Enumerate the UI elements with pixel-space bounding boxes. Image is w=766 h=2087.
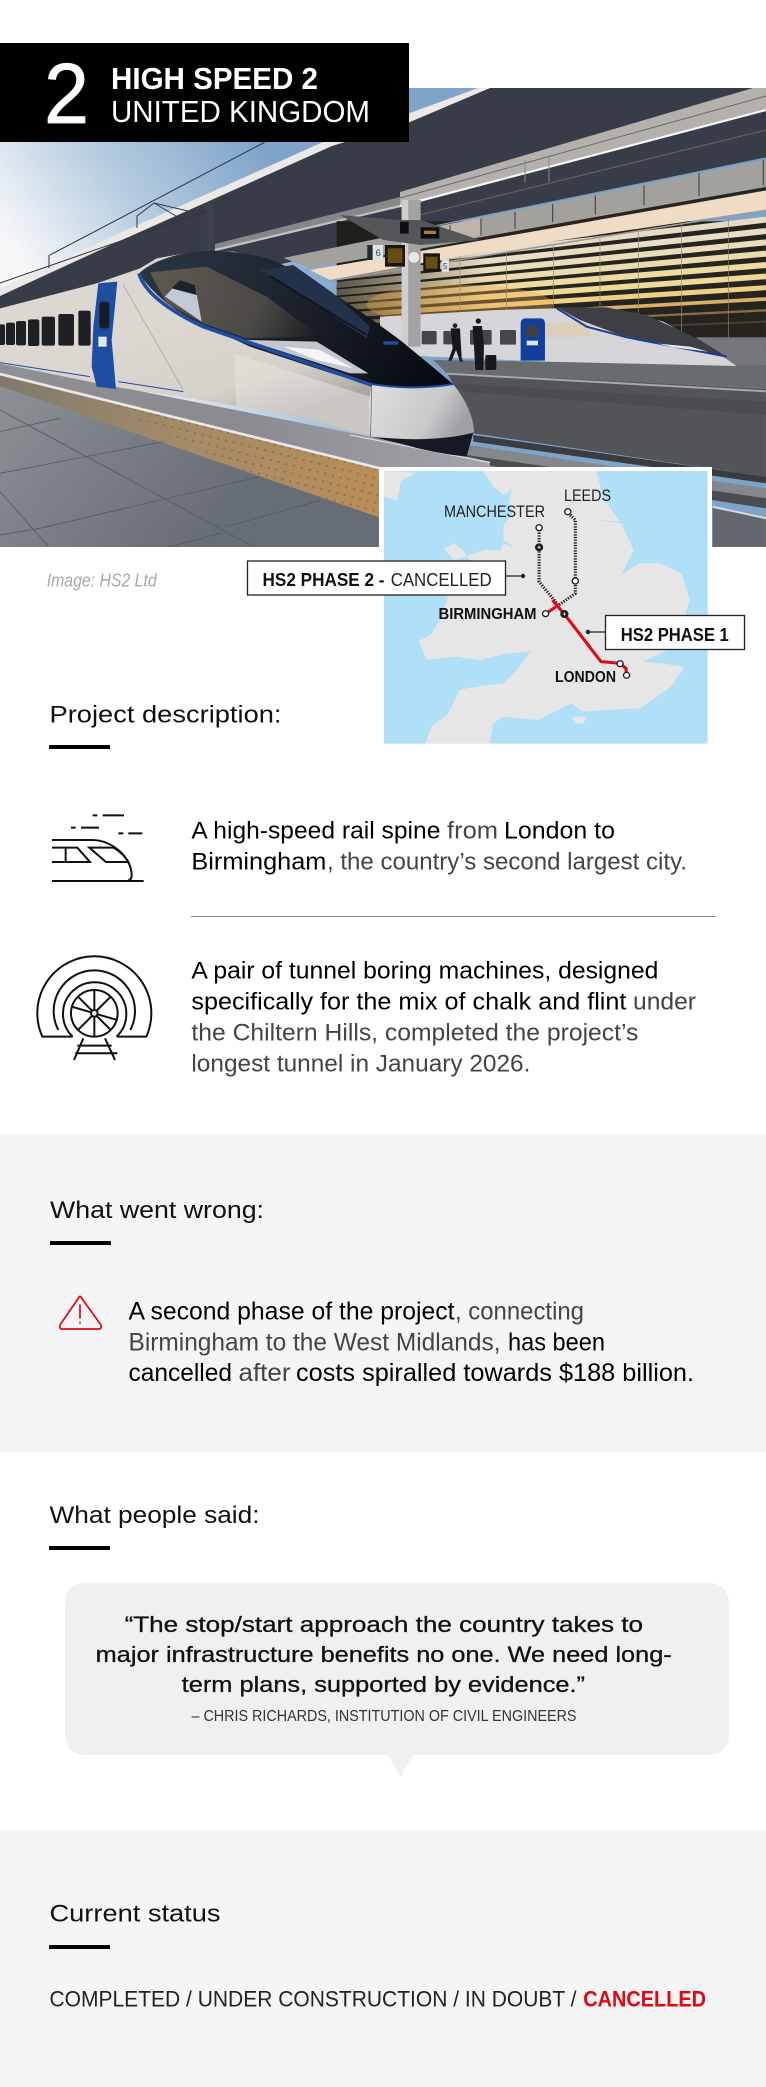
image credit: Image: HS2 Ltd [47,570,158,590]
callout: phase 2 cancelled [248,561,525,595]
quote: term plans, supported by evidence.” [182,1672,585,1697]
attribution: – CHRIS RICHARDS, INSTITUTION OF CIVIL ENGINEERS [192,1708,576,1725]
map frame [379,467,712,548]
text: rail spine: , the country’s second largest city. [327,848,687,876]
callout: phase 1: HS2 PHASE 1 [621,625,729,645]
far train, far platform and tracks [380,307,766,550]
project number: 2 [44,47,89,142]
sky and station roof [0,88,766,547]
quote [96,1612,672,1697]
text: tunnel boring machines: A pair of tunnel boring machines, designed [191,958,658,984]
icon: tunnel boring machine [37,956,151,1060]
heading rule [50,1241,111,1245]
cab [139,251,454,388]
icon: train [52,815,144,881]
blue door [92,282,117,389]
train body [0,251,474,440]
text: rail spine [191,818,687,876]
callout: phase 1 [586,616,744,650]
main train [0,251,474,457]
city label Leeds: LEEDS [564,487,611,505]
text: second phase cancelled: cancelled [128,1359,232,1387]
passenger windows [0,311,91,346]
text: rail spine: Birmingham [191,848,326,876]
panel: what people said [49,1502,729,1777]
text: second phase cancelled: costs spiralled towards $188 billion. [296,1359,694,1387]
text: tunnel boring machines [191,958,696,1078]
status options: COMPLETED / UNDER CONSTRUCTION / IN DOUBT / [50,1986,577,2012]
panel background [0,1135,766,1452]
text: second phase cancelled: , connecting [455,1298,584,1326]
heading: What people said: [50,1502,260,1529]
callout: phase 2 cancelled: HS2 PHASE 2 - [262,570,384,590]
header background [0,43,409,142]
text: rail spine: from [447,818,498,844]
heading: What went wrong: [50,1197,264,1224]
platform pillar, signs and clock: 6 [376,248,381,258]
nose [369,385,474,439]
icon: warning triangle [60,1296,101,1329]
platform pillar, signs and clock: 5 [443,262,448,271]
city label Birmingham: BIRMINGHAM [438,606,536,623]
nose skirt [371,433,473,457]
cancelled phase 2 route [539,515,575,606]
callout: phase 2 cancelled: CANCELLED [391,570,492,590]
status cancelled: CANCELLED [583,1986,706,2012]
heading rule [49,1945,110,1949]
country: UNITED KINGDOM [111,94,370,129]
text: rail spine: A high-speed rail spine [191,818,440,844]
heading: Project description: [50,702,282,728]
header band [0,43,409,142]
panel: what went wrong [0,1135,766,1452]
text: rail spine: London to [504,818,615,844]
text: tunnel boring machines: the Chiltern Hills, completed the project’s [191,1020,638,1046]
near platform and tactile strip [0,363,490,548]
city label London: LONDON [555,669,616,686]
project name: HIGH SPEED 2 [111,61,318,96]
panel: project description [37,702,716,1078]
heading rule [49,1546,110,1550]
station wall: fascia, glow and slats [283,158,766,355]
text: tunnel boring machines: longest tunnel in January 2026. [191,1050,530,1078]
photo: HS2 train at station [0,88,766,550]
text: tunnel boring machines: under [633,988,696,1016]
panel: current status [0,1831,766,2087]
body lines [0,363,183,392]
text: second phase cancelled: has been [508,1328,605,1356]
quote: major infrastructure benefits no one. We need long- [96,1642,672,1667]
heading: Current status [50,1900,220,1928]
speech bubble [65,1583,729,1777]
text: second phase cancelled [128,1298,694,1387]
text: second phase cancelled: A second phase of the project [128,1298,455,1326]
city label Manchester: MANCHESTER [444,503,545,521]
stations [536,509,630,678]
map of England and Wales [384,471,708,744]
map panel [248,467,744,744]
phase 1 route [546,600,627,675]
heading rule [49,745,110,749]
text: second phase cancelled: Birmingham to the West Midlands, [128,1328,500,1356]
panel background [0,1831,766,2087]
quote: “The stop/start approach the country takes to [125,1612,643,1637]
platform pillar, signs and clock [340,200,480,347]
text: second phase cancelled: after [238,1359,290,1387]
text: tunnel boring machines: specifically for the mix of chalk and flint [191,988,627,1016]
